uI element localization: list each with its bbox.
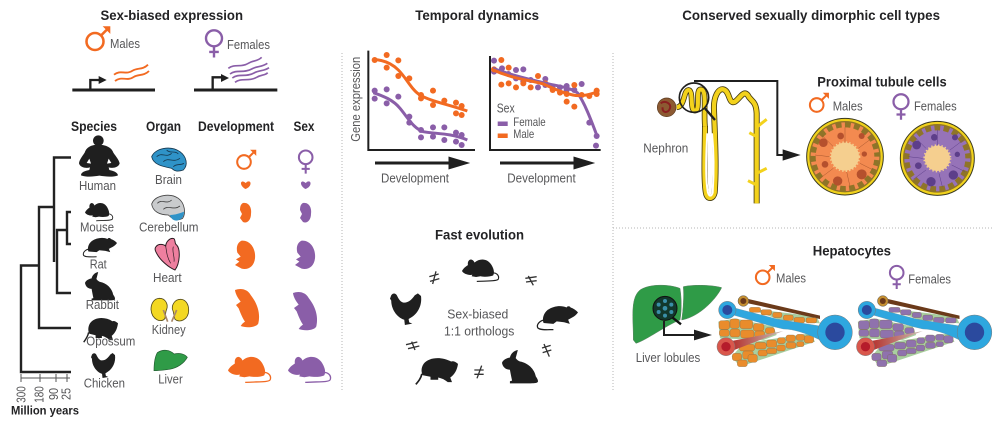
species: rabbit: Rabbit: [86, 297, 119, 312]
heading: proximal tubule cells: Proximal tubule cells: [817, 74, 947, 90]
organ: liver: Liver: [158, 372, 183, 387]
arrow: development, left: [375, 158, 465, 168]
label: nephron: Nephron: [643, 141, 688, 156]
arrow: liver to hepatocytes: [664, 321, 712, 340]
time axis: [11, 374, 79, 418]
divider: left: [341, 53, 343, 392]
column headers: Organ: [146, 118, 181, 134]
cell: female proximal tubule: [900, 121, 974, 195]
label: males: Males: [776, 270, 806, 285]
icon: rat: [537, 306, 578, 330]
label: males: Males: [833, 99, 863, 114]
legend: sex: Female: [513, 115, 546, 129]
species: rat: [83, 238, 117, 272]
axis label: gene expression: Gene expression: [348, 57, 363, 142]
phylogenetic tree: [21, 158, 71, 372]
arrow: nephron to cells: [694, 81, 801, 161]
icon: mouse: [462, 259, 499, 281]
organ: heart: Heart: [153, 270, 182, 285]
label: females: Females: [908, 272, 951, 287]
species: human: Human: [79, 178, 116, 193]
organ: heart: [153, 238, 182, 285]
column headers: [71, 118, 315, 134]
species: chicken: [84, 353, 125, 391]
organ: liver: [154, 350, 187, 387]
panel: fast evolution: [390, 226, 578, 384]
column headers: Species: [71, 118, 117, 134]
heading: temporal dynamics: Temporal dynamics: [415, 7, 539, 23]
panel: sex-biased expression: [11, 7, 331, 418]
organ: brain: Brain: [155, 172, 182, 187]
legend: sex: Sex: [497, 100, 515, 115]
time axis: 180: [32, 386, 46, 403]
legend: sex: [497, 100, 546, 141]
gene with purple transcripts: [194, 57, 277, 90]
not-equal marks: [406, 271, 551, 378]
center label: 1:1 orthologs: [444, 324, 515, 339]
center label: Sex-biased: [447, 306, 508, 321]
heading: sex-biased expression: Sex-biased expression: [100, 7, 243, 23]
organ: cerebellum: [139, 195, 198, 235]
development column, male: [228, 150, 271, 382]
column headers: Sex: [294, 118, 315, 134]
icon: female symbol: [890, 266, 904, 289]
icon: female symbol: [894, 94, 908, 120]
label: development, left: Development: [381, 171, 449, 186]
icon: opossum: [416, 358, 458, 384]
heading: conserved sexually dimorphic cell types: Conserved sexually dimorphic cell types: [682, 7, 940, 23]
organ: kidney: [151, 298, 189, 337]
liver with magnifier: [633, 285, 722, 343]
time axis: 25: [58, 388, 74, 400]
species: mouse: [80, 203, 114, 235]
organ: cerebellum: Cerebellum: [139, 220, 198, 235]
hepatocytes: female: [856, 296, 992, 367]
development column, female: [288, 150, 331, 382]
chart: left line chart: [368, 51, 475, 150]
icon: male symbol: [810, 93, 829, 112]
panel: temporal dynamics: [348, 7, 601, 186]
nephron diagram: [657, 83, 767, 203]
center label: [444, 306, 515, 339]
label: males: Males: [110, 36, 140, 51]
label: liver lobules: Liver lobules: [636, 350, 701, 365]
organ: brain: [152, 148, 186, 187]
icon: male symbol: [756, 265, 775, 284]
cell: male proximal tubule: [807, 118, 883, 195]
time axis: Million years: [11, 404, 79, 418]
icon: male symbol: [86, 26, 110, 50]
gene with orange transcripts: [72, 65, 155, 90]
species: rat: Rat: [90, 257, 107, 272]
label: development, right: Development: [507, 171, 576, 186]
divider: right: [613, 53, 992, 392]
heading: fast evolution: Fast evolution: [435, 226, 524, 242]
label: females: Females: [227, 37, 270, 52]
icon: female symbol: [206, 30, 222, 58]
time axis: 300: [14, 386, 28, 403]
chart: right line chart: [490, 56, 601, 150]
time axis: 90: [46, 388, 61, 400]
hepatocytes: male: [717, 296, 852, 367]
species: opossum: [84, 318, 135, 349]
icon: rabbit: [502, 350, 538, 383]
species: rabbit: [85, 272, 119, 312]
label: females: Females: [914, 99, 957, 114]
panel: conserved cell types: [633, 7, 992, 367]
column headers: Development: [198, 118, 274, 134]
species: chicken: Chicken: [84, 376, 125, 391]
legend: sex: Male: [513, 127, 535, 141]
species: human: [79, 135, 120, 193]
organ: kidney: Kidney: [152, 322, 186, 337]
species: mouse: Mouse: [80, 220, 114, 235]
species: opossum: Opossum: [86, 334, 135, 349]
arrow: development, right: [500, 158, 590, 168]
heading: hepatocytes: Hepatocytes: [813, 243, 891, 259]
icon: chicken: [390, 293, 421, 325]
